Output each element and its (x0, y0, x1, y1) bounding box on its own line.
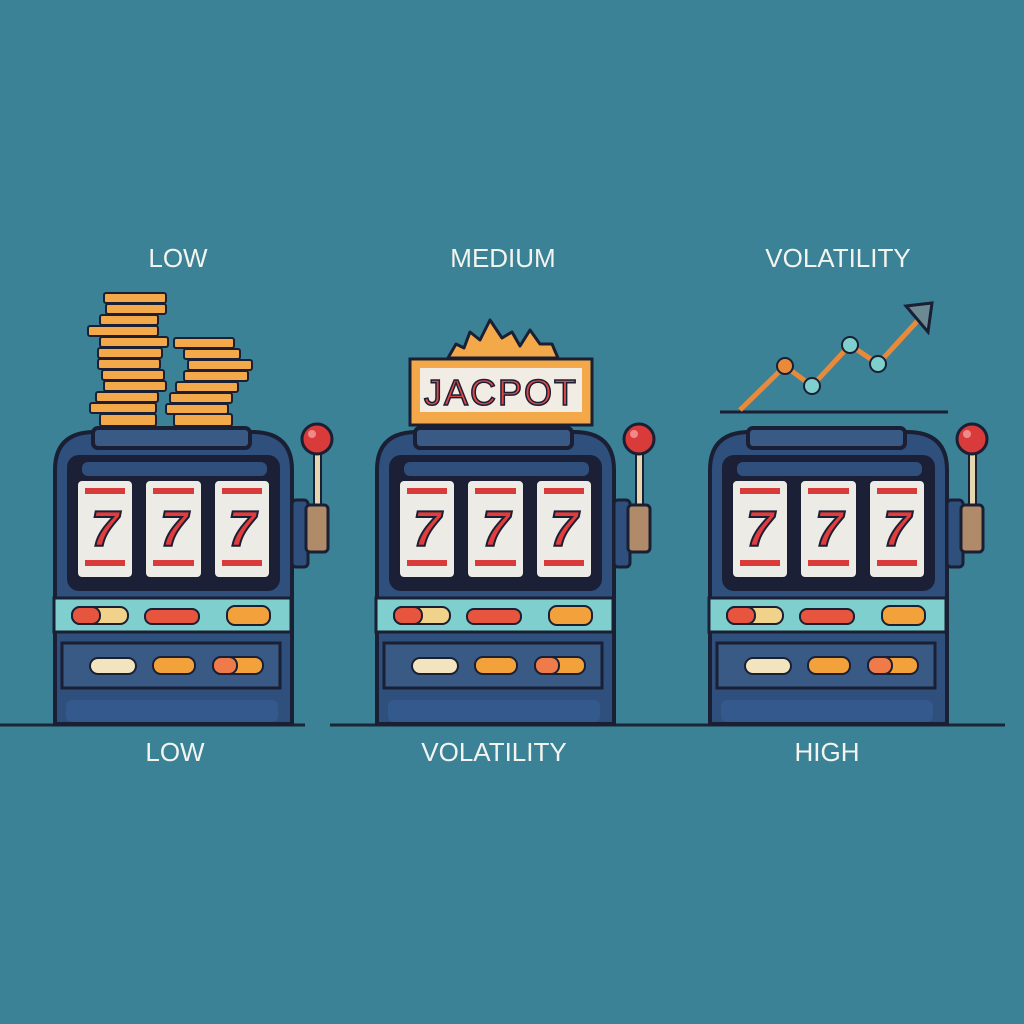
jackpot sign: JACPOT (424, 372, 578, 413)
line chart arrow (720, 303, 948, 412)
slot machine: high (709, 424, 987, 724)
label: HIGH bottom: HIGH (794, 737, 860, 767)
slot machine: medium (376, 424, 654, 724)
jackpot sign (410, 320, 592, 425)
coin stacks (88, 293, 252, 426)
label: MEDIUM top: MEDIUM (450, 243, 556, 273)
label: VOLATILITY bottom: VOLATILITY (421, 737, 567, 767)
label: VOLATILITY top: VOLATILITY (765, 243, 911, 273)
label: LOW bottom: LOW (145, 737, 205, 767)
label: LOW top: LOW (148, 243, 208, 273)
slot machine: low (54, 424, 332, 724)
